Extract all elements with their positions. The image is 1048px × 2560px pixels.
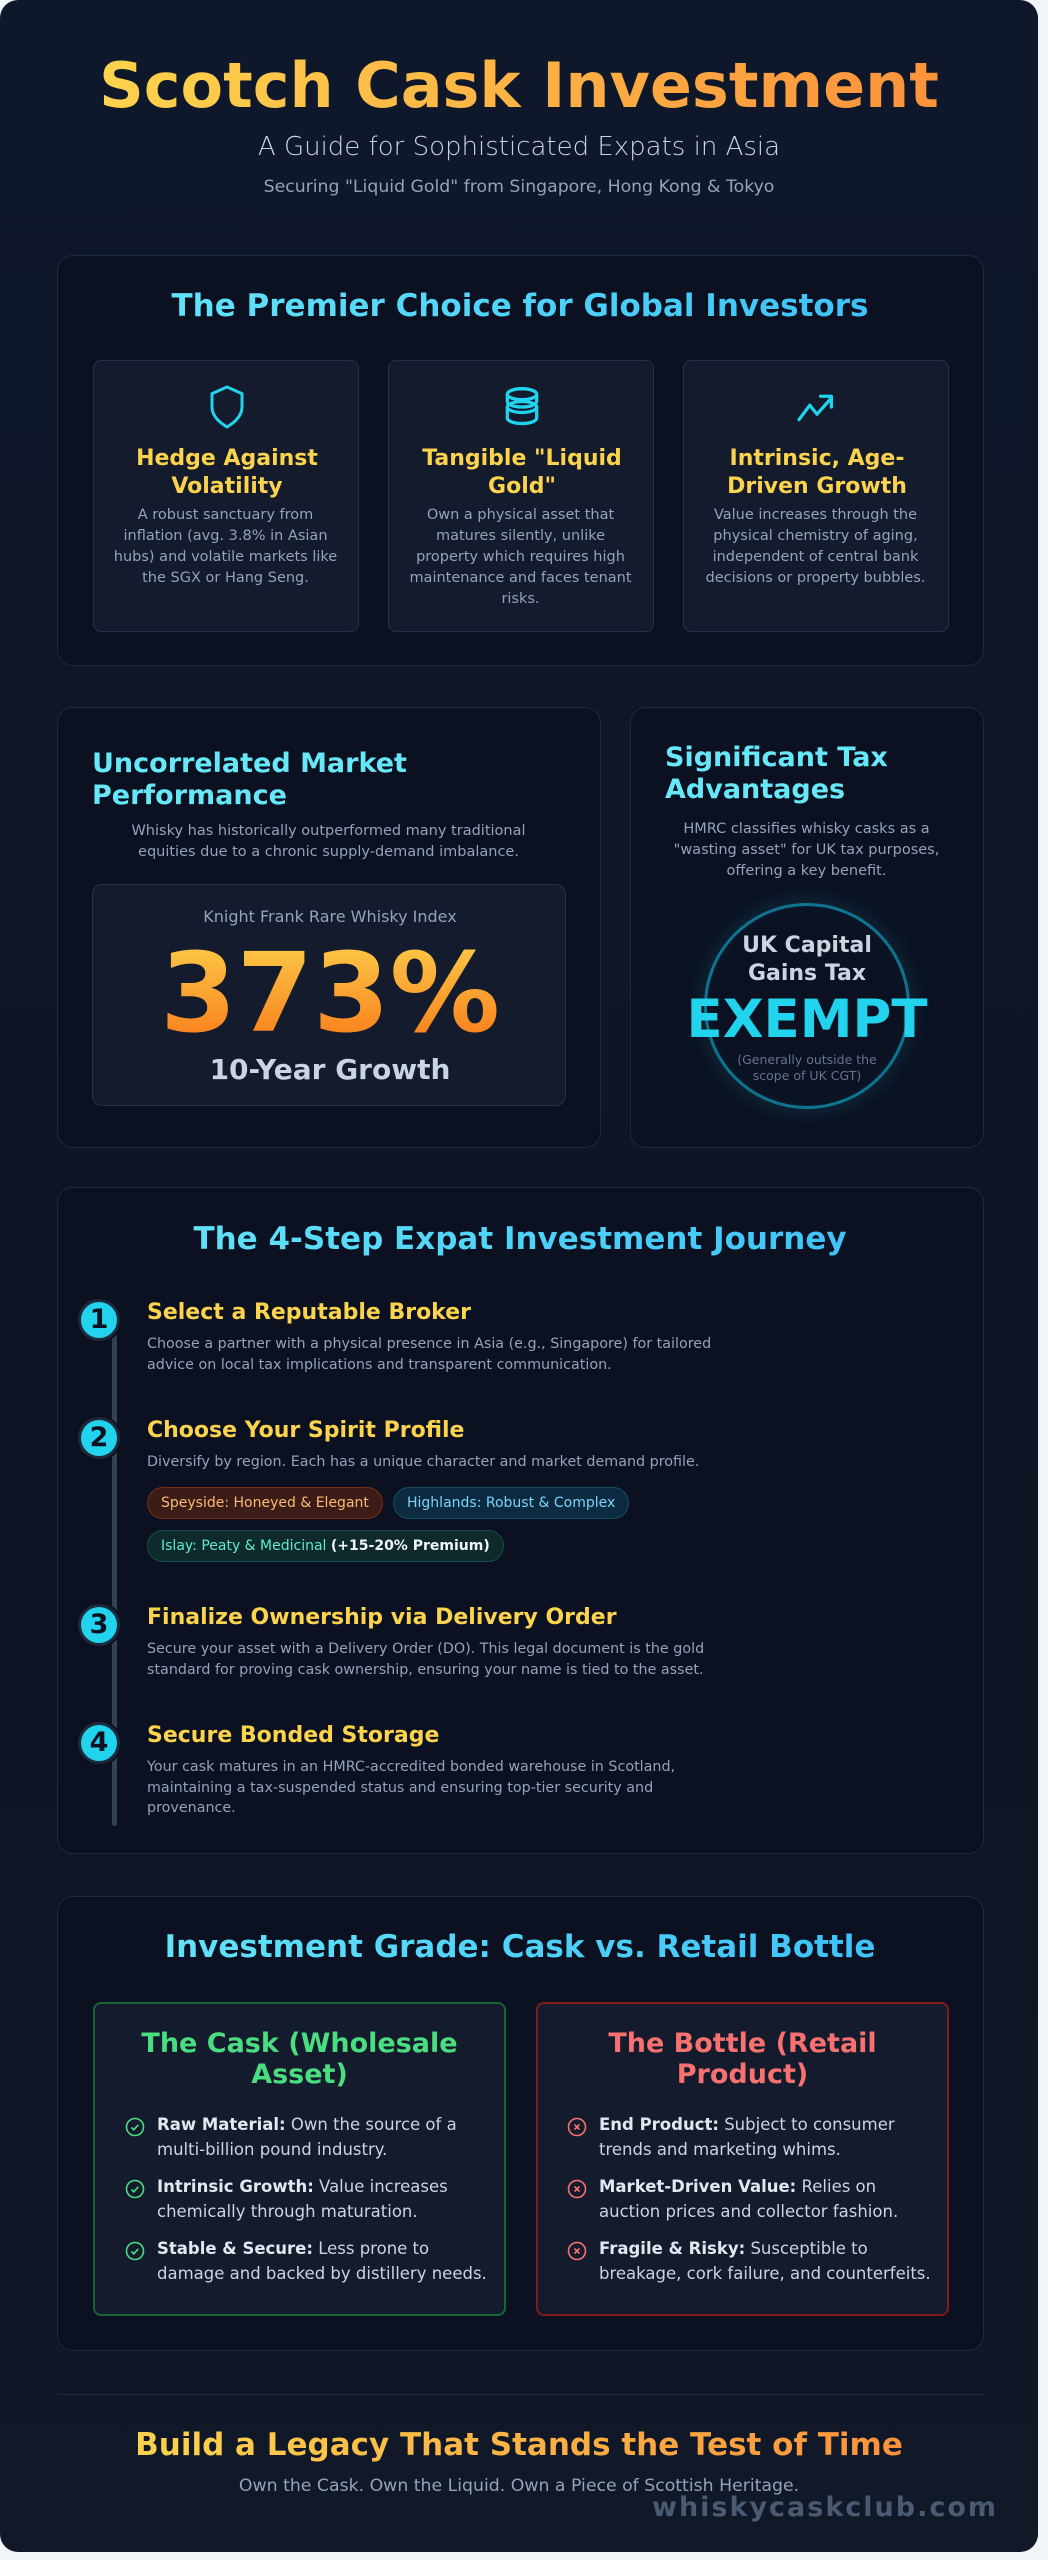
box heading: Asset) (251, 2059, 348, 2090)
card heading (727, 446, 907, 499)
heading: Significant Tax Advantages (665, 742, 888, 805)
panel: cask vs bottle (57, 1896, 984, 2351)
card text: the SGX or Hang Seng. (142, 570, 309, 586)
step 3 title: Finalize Ownership via Delivery Order (147, 1605, 617, 1630)
list (568, 2115, 931, 2283)
card text: property which requires high (416, 549, 625, 565)
icon: shield (210, 386, 244, 428)
pill: highlands (393, 1487, 629, 1519)
card: growth (683, 360, 949, 632)
list (126, 2115, 487, 2283)
card heading: Tangible "Liquid (422, 446, 622, 471)
timeline line (112, 1330, 117, 1826)
stat number: 373% (160, 929, 500, 1057)
panel: tax advantages (630, 707, 984, 1148)
step 1 text: Choose a partner with a physical presence in Asia (e.g., Singapore) for tailored advice on local tax implications and transparent communication. (147, 1336, 711, 1372)
step 2 number: 2 (90, 1422, 108, 1453)
list: Fragile & Risky: Susceptible to (599, 2239, 868, 2258)
card heading: Volatility (171, 474, 283, 499)
card text: physical chemistry of aging, (713, 528, 918, 544)
heading: The Premier Choice for Global Investors (172, 288, 868, 324)
box heading: Product) (677, 2059, 808, 2090)
text: Whisky has historically outperformed many traditional (131, 823, 526, 839)
step 2 title: Choose Your Spirit Profile (147, 1418, 464, 1443)
list: Intrinsic Growth: Value increases (157, 2177, 448, 2196)
panel: premier choice (57, 255, 984, 666)
heading: Investment Grade: Cask vs. Retail Bottle (165, 1929, 875, 1965)
card heading: Driven Growth (727, 474, 907, 499)
step 3 number: 3 (90, 1609, 108, 1640)
card text: maintenance and faces tenant (409, 570, 632, 586)
tagline: Securing "Liquid Gold" from Singapore, Hong Kong & Tokyo (264, 177, 774, 197)
badge: exempt circle: Gains Tax (748, 961, 866, 986)
brand url: whiskycaskclub.com (652, 2492, 998, 2523)
heading (58, 286, 982, 326)
text: offering a key benefit. (727, 863, 886, 879)
box: cask (93, 2002, 506, 2316)
badge: exempt circle: (Generally outside the scope of UK CGT) (737, 1052, 877, 1083)
heading (58, 1927, 982, 1967)
box heading (608, 2028, 877, 2090)
step 4 text: Your cask matures in an HMRC-accredited bonded warehouse in Scotland, maintaining a tax-suspended status and ensuring top-tier security and provenance. (147, 1759, 675, 1816)
pill: speyside: Speyside: Honeyed & Elegant (161, 1495, 369, 1511)
list: End Product: Subject to consumer (599, 2115, 895, 2134)
text: equities due to a chronic supply-demand imbalance. (138, 844, 519, 860)
badge: exempt circle: EXEMPT (686, 989, 928, 1050)
card text: risks. (501, 591, 540, 607)
step 2 text: Diversify by region. Each has a unique character and market demand profile. (147, 1454, 699, 1470)
badge: exempt circle (704, 903, 910, 1109)
icon: trending up (797, 394, 834, 422)
card text (706, 507, 925, 586)
step 1 number: 1 (90, 1304, 108, 1335)
box heading: The Cask (Wholesale (141, 2028, 458, 2059)
card text: Own a physical asset that (427, 507, 614, 523)
step 4 title: Secure Bonded Storage (147, 1723, 439, 1748)
step 4 number: 4 (90, 1727, 108, 1758)
card text: hubs) and volatile markets like (114, 549, 337, 565)
card text: independent of central bank (713, 549, 918, 565)
stat label: Knight Frank Rare Whisky Index (203, 907, 457, 926)
pill: highlands: Highlands: Robust & Complex (407, 1495, 615, 1511)
subtitle: A Guide for Sophisticated Expats in Asia (258, 132, 780, 162)
list: damage and backed by distillery needs. (157, 2264, 487, 2283)
box heading (141, 2028, 458, 2090)
list: Market-Driven Value: Relies on (599, 2177, 876, 2196)
card text (114, 507, 337, 586)
card heading: Gold" (488, 474, 556, 499)
box heading: The Bottle (Retail (608, 2028, 877, 2059)
badge: exempt circle: UK Capital (742, 933, 872, 958)
card heading (136, 446, 318, 499)
footer heading: Build a Legacy That Stands the Test of Time (135, 2427, 903, 2463)
card text: matures silently, unlike (436, 528, 605, 544)
panel: 4-step journey (57, 1187, 984, 1854)
text (674, 821, 939, 879)
card text (409, 507, 632, 607)
card text: Value increases through the (714, 507, 917, 523)
stat box (92, 884, 566, 1106)
box: bottle (536, 2002, 949, 2316)
card heading: Intrinsic, Age- (730, 446, 904, 471)
pill: islay (147, 1530, 504, 1562)
list: Stable & Secure: Less prone to (157, 2239, 429, 2258)
list: Raw Material: Own the source of a (157, 2115, 457, 2134)
stat caption: 10-Year Growth (210, 1053, 450, 1086)
card: hedge (93, 360, 359, 632)
card heading (422, 446, 622, 499)
icon: database (506, 387, 538, 426)
step 1 title: Select a Reputable Broker (147, 1300, 471, 1325)
pill: islay: Islay: Peaty & Medicinal (+15-20% Premium) (161, 1538, 490, 1554)
card: liquid gold (388, 360, 654, 632)
heading: The 4-Step Expat Investment Journey (193, 1221, 847, 1257)
footer tagline: Own the Cask. Own the Liquid. Own a Piece of Scottish Heritage. (239, 2476, 799, 2496)
card text: decisions or property bubbles. (706, 570, 925, 586)
heading (58, 1219, 982, 1259)
step 3 text: Secure your asset with a Delivery Order (DO). This legal document is the gold standard for proving cask ownership, ensuring your name is tied to the asset. (147, 1641, 704, 1678)
pill: speyside (147, 1487, 383, 1519)
card heading: Hedge Against (136, 446, 318, 471)
heading: Uncorrelated Market Performance (92, 748, 407, 811)
card text: A robust sanctuary from (138, 507, 313, 523)
list: breakage, cork failure, and counterfeits. (599, 2264, 931, 2283)
text (131, 823, 526, 860)
list: multi-billion pound industry. (157, 2140, 387, 2159)
text: "wasting asset" for UK tax purposes, (674, 842, 939, 858)
panel: market performance (57, 707, 601, 1148)
list: chemically through maturation. (157, 2202, 418, 2221)
list: trends and marketing whims. (599, 2140, 841, 2159)
list: auction prices and collector fashion. (599, 2202, 898, 2221)
title: Scotch Cask Investment (99, 49, 939, 122)
card text: inflation (avg. 3.8% in Asian (123, 528, 328, 544)
text: HMRC classifies whisky casks as a (683, 821, 930, 837)
